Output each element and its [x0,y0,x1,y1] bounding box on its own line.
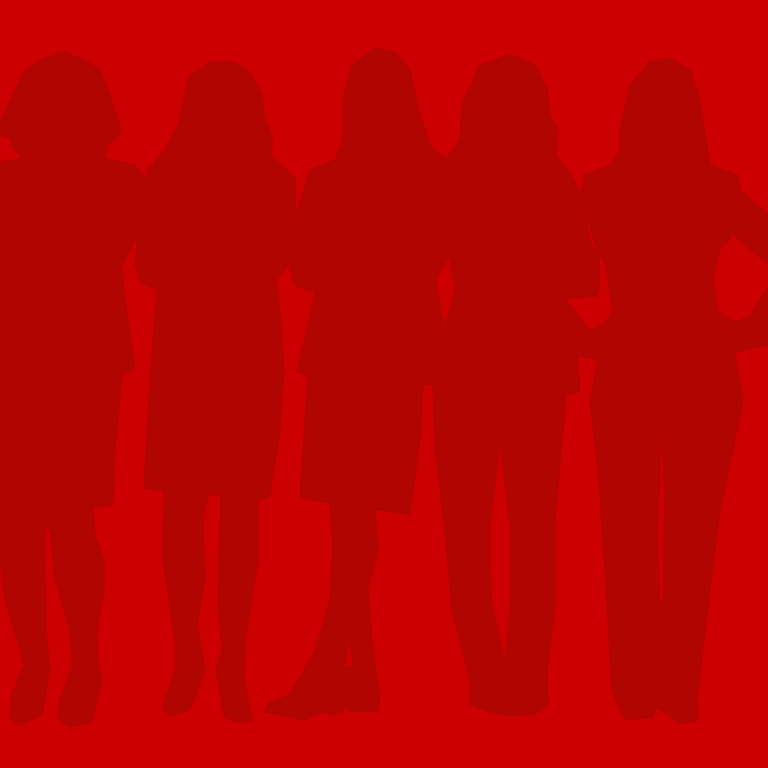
gap: figure 3 ankles [346,640,353,666]
figure 3: woman in dress and heels [265,48,452,720]
gap: figure 4 legs [490,445,510,660]
figure 1: woman with short hair [0,52,145,727]
gap: figure 3 and 4 at the waist [436,258,455,325]
gap: figure 5 legs [658,440,664,600]
gap: figure 5 hand on hip [714,235,768,322]
figure 5: woman with hand on hip [565,58,768,724]
figure 4: woman in trousers with crossed arm [433,54,600,716]
background gaps between limbs [346,235,768,666]
gap: figure 4 arm and figure 5 torso [566,240,612,330]
figure 2: woman in skirt suit [135,62,296,723]
